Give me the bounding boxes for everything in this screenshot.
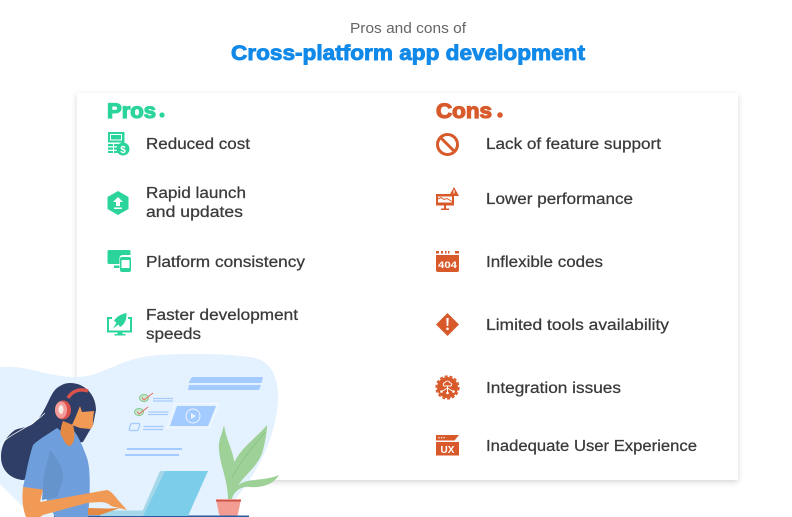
pot <box>216 499 241 517</box>
hair <box>1 383 96 480</box>
bottom line <box>54 516 249 517</box>
bottom text lines <box>125 449 182 455</box>
illustration: floating UI elements <box>125 377 263 455</box>
checklist <box>129 393 173 430</box>
text: faster development <box>146 307 299 343</box>
icon: lower performance <box>436 187 459 210</box>
heading: pros: Pros <box>107 100 156 123</box>
text: inflexible codes: Inflexible codes <box>486 254 603 271</box>
shirt <box>23 428 90 517</box>
icon: UX window: UX <box>441 445 455 456</box>
text: faster development: speeds <box>146 326 201 343</box>
icon: reduced cost <box>108 132 130 156</box>
text: inadequate user experience: Inadequate User Experience <box>486 438 697 455</box>
text: lower performance: Lower performance <box>486 191 633 208</box>
hair strands <box>0 413 45 447</box>
text: integration issues: Integration issues <box>486 380 621 397</box>
text: rapid launch <box>146 185 246 221</box>
text: lack of feature support: Lack of feature support <box>486 136 662 153</box>
text: platform consistency: Platform consistency <box>146 254 305 271</box>
text: rapid launch: and updates <box>146 204 243 221</box>
text: faster development: Faster development <box>146 307 299 324</box>
illustration: woman with headphones and laptop <box>0 383 208 517</box>
video player <box>167 404 218 428</box>
text: rapid launch: Rapid launch <box>146 185 246 202</box>
icon: warning diamond <box>436 313 459 336</box>
neck <box>61 421 74 446</box>
laptop <box>100 471 208 516</box>
heading: cons: Cons <box>436 100 492 123</box>
icon: reduced cost: $ <box>120 145 126 156</box>
icon: platform consistency <box>108 250 131 272</box>
illustration: background blob <box>0 354 278 517</box>
arm <box>22 487 127 517</box>
title: Cross-platform app development <box>231 41 585 65</box>
icon: UX window <box>436 435 459 456</box>
face <box>72 406 94 429</box>
lower hand <box>88 508 120 515</box>
illustration: plant <box>216 425 279 517</box>
icon: faster development <box>108 313 131 336</box>
icon: no entry <box>438 134 458 154</box>
text: limited tools: Limited tools availability <box>486 317 669 334</box>
icon: 404 <box>436 251 459 272</box>
icon: integration <box>436 376 459 399</box>
headphones <box>55 390 88 420</box>
text: reduced cost: Reduced cost <box>146 136 251 153</box>
panel: card <box>77 93 738 480</box>
icon: 404: 404 <box>438 260 458 271</box>
subtitle: Pros and cons of <box>350 21 467 37</box>
top text lines <box>188 377 263 390</box>
icon: rapid launch <box>108 191 128 215</box>
